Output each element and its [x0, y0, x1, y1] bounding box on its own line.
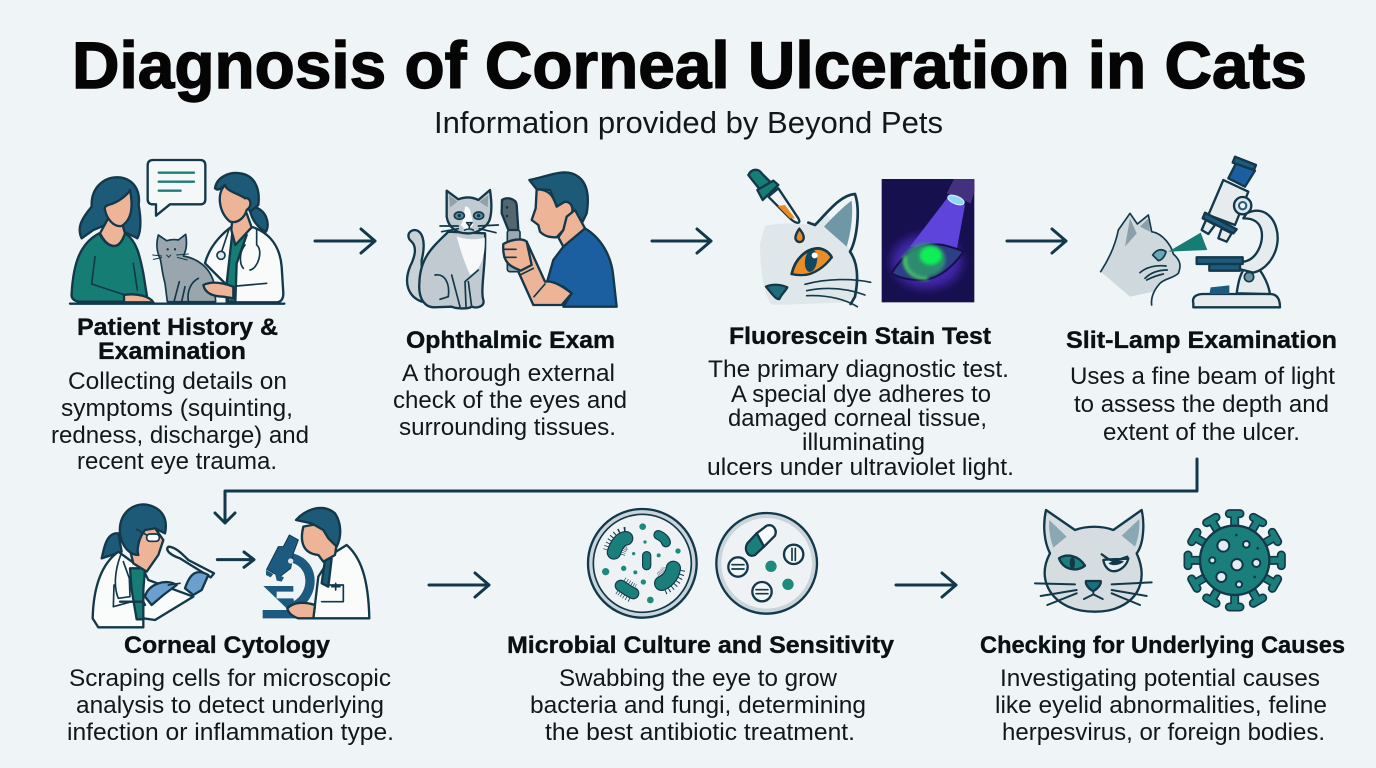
panel: checking for underlying causes	[980, 510, 1345, 746]
icon: vet collecting sample and scientist at microscope	[93, 504, 369, 627]
text: patient history description: Collecting details on	[68, 368, 287, 395]
text: patient history description: redness, discharge) and	[51, 422, 309, 449]
text: underlying causes description	[995, 665, 1327, 746]
text: corneal cytology description: analysis to detect underlying	[76, 692, 384, 719]
text: fluorescein description: illuminating	[802, 429, 925, 456]
text: patient history description: symptoms (squinting,	[61, 395, 293, 422]
arrow: step 6 to 7	[896, 573, 956, 597]
text: microbial culture description	[530, 665, 866, 746]
arrow: step 2 to 3	[652, 229, 711, 253]
title: Diagnosis of Corneal Ulceration in Cats	[72, 28, 1307, 102]
heading: patient history: Patient History &	[77, 314, 278, 341]
text: patient history description	[51, 368, 309, 475]
icon: petri dish with bacteria	[588, 509, 697, 618]
text: fluorescein description: A special dye adheres to	[731, 381, 991, 408]
text: slit-lamp description: extent of the ulcer.	[1103, 419, 1300, 446]
text: ophthalmic exam description	[393, 360, 627, 441]
icon: herpesvirus particle	[1188, 514, 1281, 607]
text: patient history description: recent eye trauma.	[77, 448, 277, 475]
text: slit-lamp description	[1070, 363, 1335, 446]
text: corneal cytology description: infection or inflammation type.	[67, 719, 394, 746]
text: fluorescein description: The primary diagnostic test.	[708, 356, 1009, 383]
text: ophthalmic exam description: check of the eyes and	[393, 387, 627, 414]
text: corneal cytology description	[67, 665, 394, 746]
panel: patient history and examination	[51, 160, 309, 475]
text: microbial culture description: bacteria and fungi, determining	[530, 692, 866, 719]
text: slit-lamp description: Uses a fine beam of light	[1070, 363, 1335, 390]
heading: slit-lamp examination: Slit-Lamp Examination	[1066, 327, 1337, 354]
text: microbial culture description: the best antibiotic treatment.	[545, 719, 855, 746]
heading: corneal cytology: Corneal Cytology	[124, 632, 331, 659]
arrow: step 1 to 2	[315, 229, 375, 253]
icon: owner, vet and cat consultation	[70, 160, 284, 304]
text: ophthalmic exam description: A thorough external	[402, 360, 615, 387]
icon: squinting cat face	[1035, 510, 1152, 612]
icon: antibiotic sensitivity dish with discs and capsule	[716, 513, 817, 614]
text: fluorescein description: damaged corneal tissue,	[728, 405, 987, 432]
text: underlying causes description: like eyelid abnormalities, feline	[995, 692, 1327, 719]
icon: cat under slit-lamp microscope	[1101, 157, 1280, 307]
text: microbial culture description: Swabbing the eye to grow	[559, 665, 838, 692]
icon: dropper above cat eye	[748, 170, 871, 307]
icon: cat and vet with ophthalmoscope	[407, 172, 617, 308]
heading: underlying causes: Checking for Underlying Causes	[980, 632, 1345, 659]
text: ophthalmic exam description: surrounding tissues.	[399, 414, 616, 441]
panel: ophthalmic exam	[393, 172, 627, 441]
heading: fluorescein stain test: Fluorescein Stain Test	[729, 323, 991, 350]
panel: slit-lamp examination	[1066, 157, 1337, 446]
panel: microbial culture and sensitivity	[507, 509, 895, 746]
subtitle: Information provided by Beyond Pets	[434, 105, 943, 140]
heading: patient history	[77, 314, 278, 365]
arrow: step 5 to 6	[429, 573, 489, 597]
text: corneal cytology description: Scraping cells for microscopic	[69, 665, 391, 692]
heading: microbial culture: Microbial Culture and Sensitivity	[507, 632, 895, 659]
icon: UV light on stained eye	[882, 179, 974, 302]
arrow: connector from top row to bottom row	[215, 459, 1197, 523]
text: fluorescein description: ulcers under ultraviolet light.	[707, 454, 1014, 481]
text: underlying causes description: Investigating potential causes	[1000, 665, 1320, 692]
text: underlying causes description: herpesvirus, or foreign bodies.	[1002, 719, 1325, 746]
text: fluorescein description	[707, 356, 1014, 481]
panel: corneal cytology	[67, 504, 394, 746]
heading: ophthalmic exam: Ophthalmic Exam	[406, 327, 615, 354]
heading: patient history: Examination	[98, 338, 246, 365]
text: slit-lamp description: to assess the depth and	[1074, 391, 1329, 418]
panel: fluorescein stain test	[707, 170, 1014, 481]
arrow: step 3 to 4	[1007, 229, 1066, 253]
